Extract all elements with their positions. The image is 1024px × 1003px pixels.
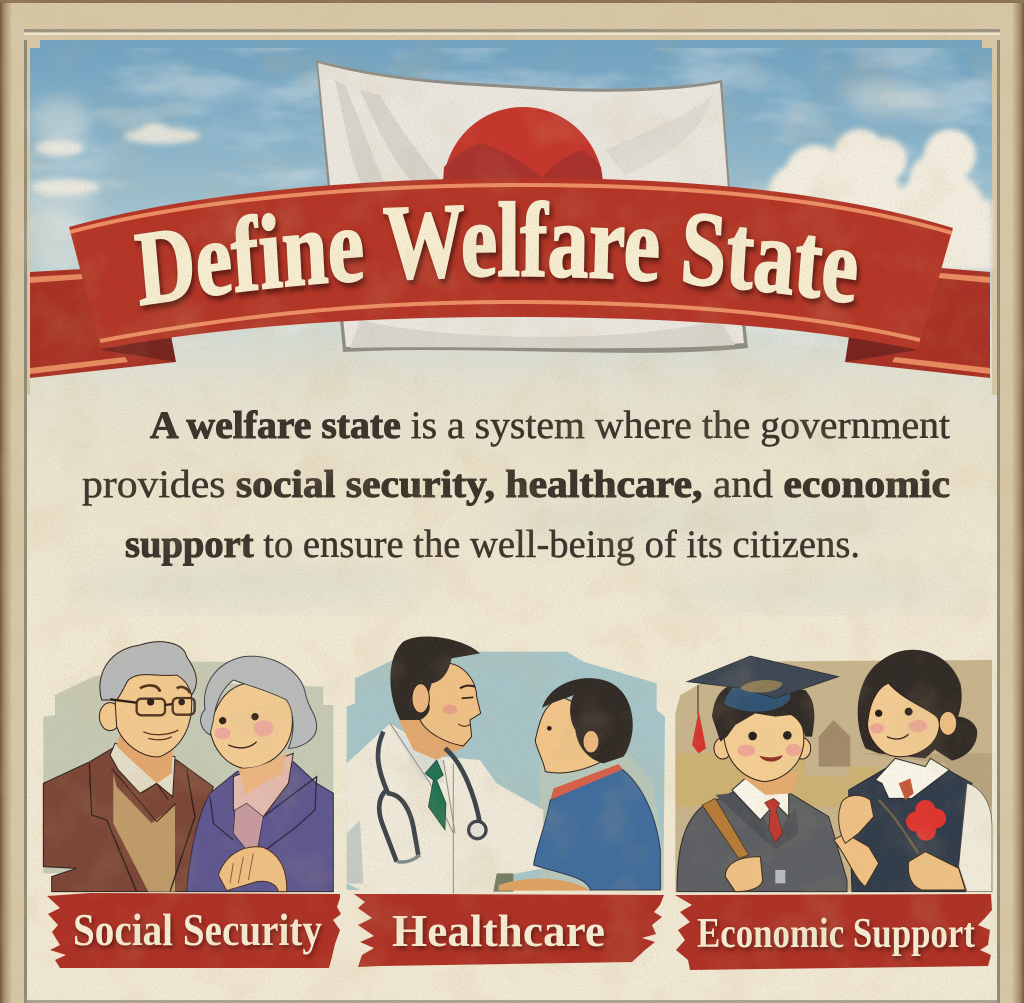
title ribbon tail: left — [30, 269, 176, 378]
illustration backdrop: tan city — [675, 660, 992, 892]
panel: economic support — [675, 650, 992, 892]
illustration backdrop: sage wash — [43, 662, 333, 892]
definition text — [82, 404, 950, 566]
soft haze in text area — [60, 502, 990, 606]
label: healthcare — [354, 894, 664, 967]
illustration backdrop: blue wash — [347, 652, 665, 890]
panel: healthcare — [347, 637, 665, 893]
title banner — [69, 178, 953, 350]
title ribbon tail: right — [845, 268, 990, 378]
definition text: A welfare state is a system where the government — [150, 404, 950, 447]
sky wisps — [30, 48, 992, 348]
patient — [499, 678, 660, 891]
girl — [834, 650, 992, 892]
boy — [677, 656, 847, 892]
label: social security: Social Security — [73, 905, 322, 955]
doctor — [347, 637, 543, 893]
definition text: support to ensure the well-being of its citizens. — [125, 523, 860, 566]
woman — [187, 656, 333, 892]
definition text: provides social security, healthcare, and economic — [82, 463, 950, 506]
flag — [316, 60, 748, 353]
label: social security — [47, 893, 341, 968]
stethoscope — [378, 732, 486, 862]
graduation cap — [687, 656, 839, 753]
flag sun — [443, 107, 603, 182]
title text: Define Welfare State — [134, 200, 862, 313]
panel: social security — [43, 642, 333, 892]
clasped hands — [218, 847, 287, 892]
man — [43, 642, 213, 892]
corsage — [906, 800, 946, 841]
label: economic support — [675, 894, 992, 970]
label: economic support: Economic Support — [697, 911, 975, 957]
clouds — [28, 79, 992, 272]
label: healthcare: Healthcare — [392, 905, 605, 956]
